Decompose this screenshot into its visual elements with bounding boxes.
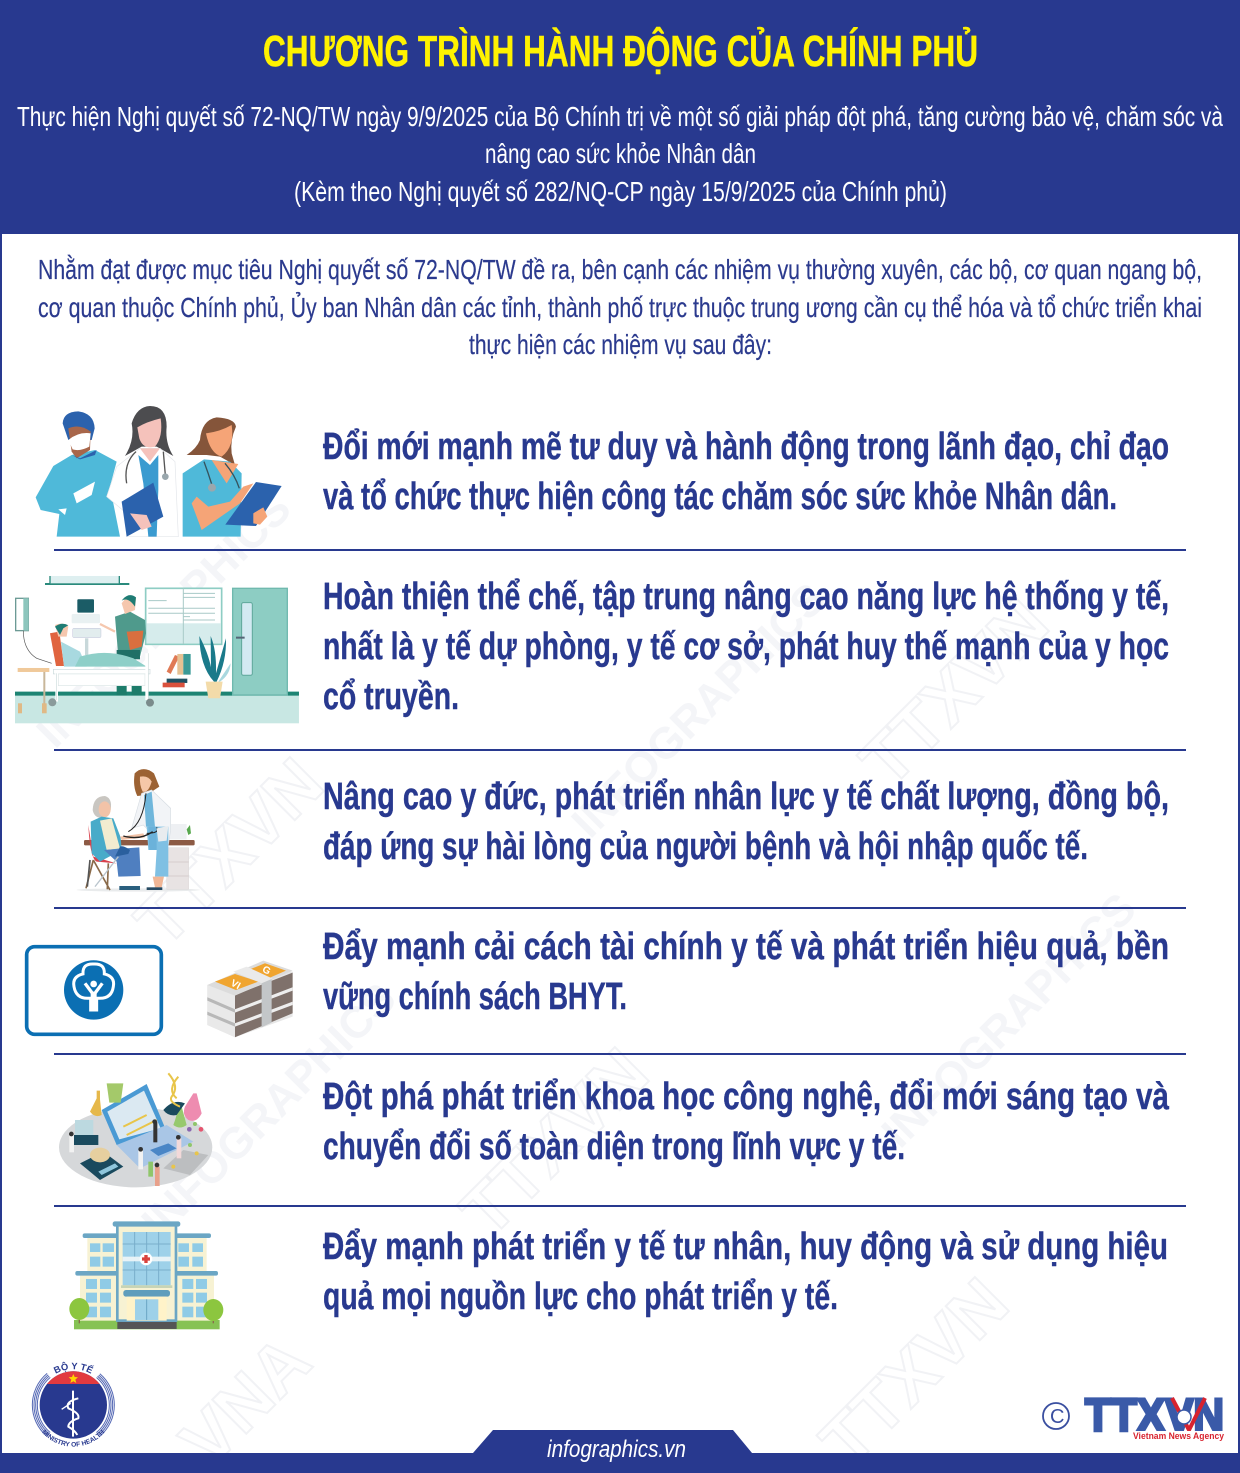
text: TTXVN	[120, 743, 338, 961]
title: CHƯƠNG TRÌNH HÀNH ĐỘNG CỦA CHÍNH PHỦ	[263, 25, 978, 76]
copyright TTXVN logo: C	[1050, 1406, 1064, 1428]
divider	[54, 907, 1186, 909]
icon: hospital room	[15, 576, 299, 723]
item 4 text: vững chính sách BHYT.	[323, 976, 627, 1018]
item 2 text: cổ truyền.	[323, 676, 459, 718]
subtitle: (Kèm theo Nghị quyết số 282/NQ-CP ngày 15/9/2025 của Chính phủ)	[294, 176, 947, 207]
divider	[54, 1205, 1186, 1207]
subtitle	[17, 101, 1223, 207]
divider	[54, 1053, 1186, 1055]
text: INFOGRAPHICS	[562, 574, 836, 847]
intro paragraph	[38, 254, 1202, 360]
icon: doctor measuring patient blood pressure	[77, 769, 200, 892]
item 5 text	[323, 1076, 1170, 1168]
icon: science and technology laptop	[59, 1073, 212, 1187]
item 1 text	[323, 426, 1169, 518]
copyright TTXVN logo: Vietnam News Agency	[1133, 1431, 1225, 1442]
item 4 text	[323, 926, 1169, 1018]
icon: Ministry of Health logo	[32, 1362, 115, 1447]
icon: stack of banknotes	[207, 961, 293, 1037]
divider	[54, 549, 1186, 551]
item 3 text	[323, 776, 1169, 868]
text: INFOGRAPHICS	[872, 884, 1146, 1157]
icon: health insurance card	[27, 947, 161, 1034]
item 6 text	[323, 1226, 1168, 1318]
icon: stack of banknotes: VI	[229, 978, 242, 992]
text: INFOGRAPHICS	[27, 484, 301, 757]
copyright TTXVN logo: TTXVN	[1085, 1389, 1224, 1441]
header band	[0, 0, 1240, 234]
divider	[54, 749, 1186, 751]
text: TTXVN	[845, 583, 1063, 801]
footer band	[0, 1430, 1240, 1473]
icon: hospital building	[69, 1221, 223, 1329]
item 2 text	[323, 576, 1169, 718]
text: TTXVN	[445, 1033, 663, 1251]
icon: stack of banknotes: G	[260, 964, 272, 978]
icon: Ministry of Health logo: BỘ Y TẾ	[54, 1362, 94, 1374]
text: INFOGRAPHICS	[132, 974, 406, 1247]
subtitle: nâng cao sức khỏe Nhân dân	[485, 138, 756, 169]
footer website: infographics.vn	[547, 1436, 686, 1463]
icon: three medical staff	[36, 406, 282, 537]
intro paragraph: thực hiện các nhiệm vụ sau đây:	[469, 329, 772, 360]
item 5 text: chuyển đổi số toàn diện trong lĩnh vực y tế.	[323, 1126, 905, 1168]
item 6 text: quả mọi nguồn lực cho phát triển y tế.	[323, 1276, 838, 1318]
icon: Ministry of Health logo: MINISTRY OF HEALTH	[42, 1430, 104, 1447]
